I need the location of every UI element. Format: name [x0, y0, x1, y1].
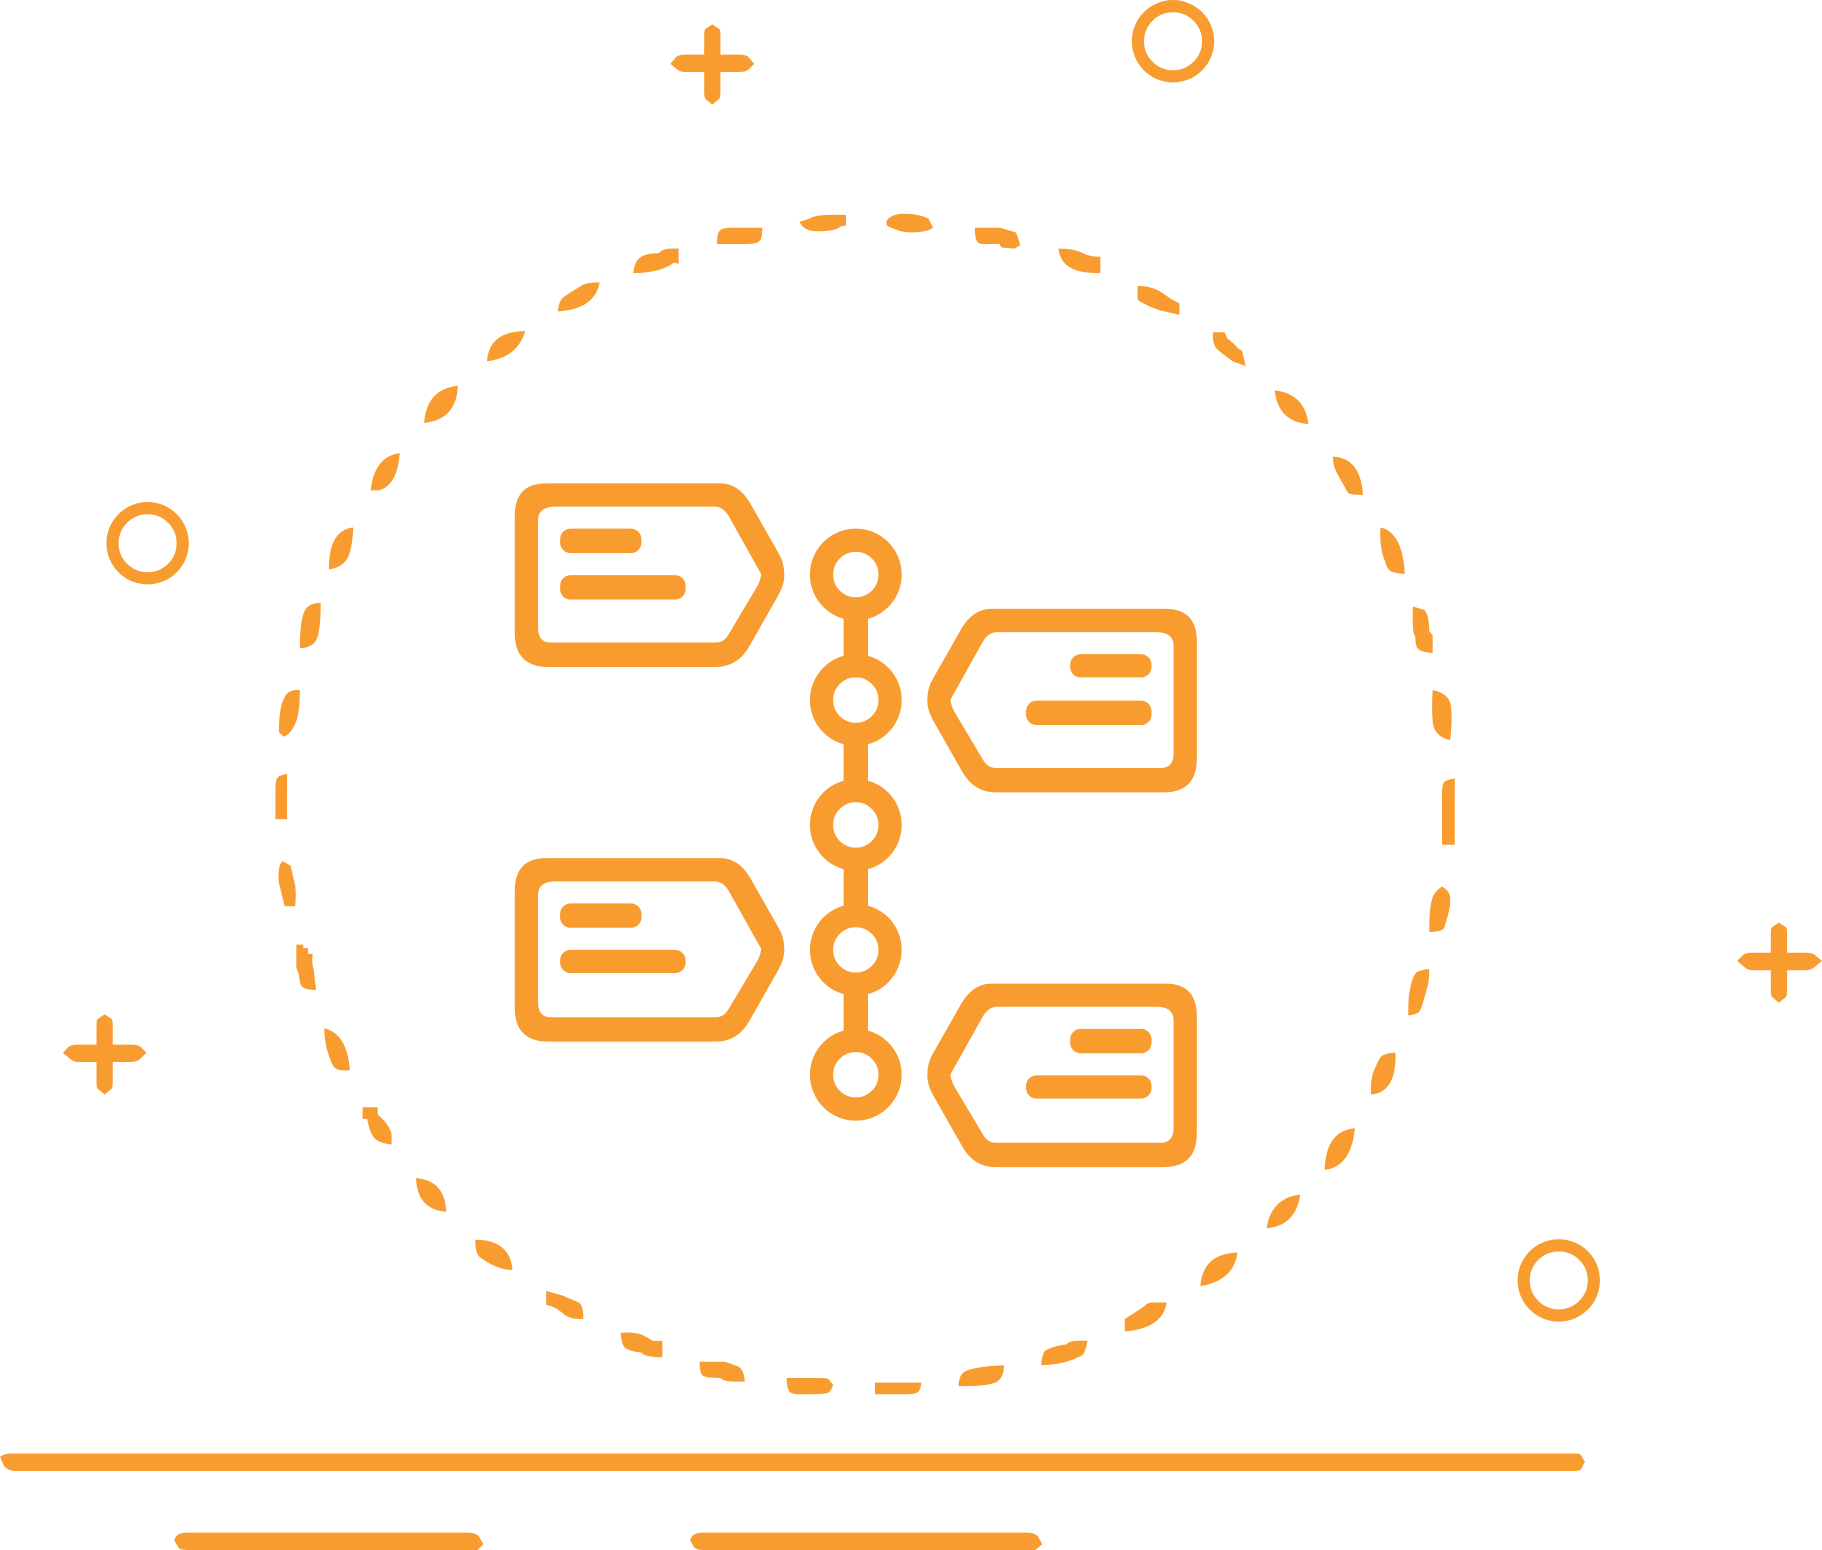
dashed circle — [275, 214, 1455, 1394]
spine stem — [844, 593, 868, 1057]
tag outline — [927, 609, 1197, 792]
tag outline — [515, 858, 784, 1042]
icon: ring bottom right — [1524, 1245, 1594, 1316]
panel: tag bottom left — [515, 858, 784, 1042]
node 3 — [822, 791, 890, 859]
node 1 — [822, 540, 890, 609]
long bar — [560, 575, 686, 600]
tag outline — [927, 984, 1197, 1167]
node 5 — [822, 1040, 890, 1109]
panel: tag top right — [927, 609, 1197, 792]
long bar — [1026, 1075, 1152, 1099]
baseline long bar — [0, 1454, 1585, 1471]
icon: plus right — [1737, 923, 1822, 1003]
short bar — [1070, 654, 1152, 677]
icon: plus left — [63, 1014, 146, 1095]
tag outline — [515, 483, 784, 667]
panel: tag top left — [515, 483, 784, 667]
lower bar left — [174, 1533, 483, 1550]
icon: plus top — [670, 24, 754, 105]
timeline spine with five nodes — [822, 540, 890, 1109]
node 2 — [822, 666, 890, 734]
long bar — [1026, 701, 1152, 725]
icon: ring left — [113, 508, 183, 578]
short bar — [1070, 1029, 1152, 1053]
lower bar right — [690, 1533, 1042, 1550]
short bar — [560, 529, 641, 553]
long bar — [560, 950, 686, 973]
panel: tag bottom right — [927, 984, 1197, 1167]
icon: ring top — [1138, 6, 1208, 76]
short bar — [560, 903, 641, 928]
node 4 — [822, 916, 890, 984]
